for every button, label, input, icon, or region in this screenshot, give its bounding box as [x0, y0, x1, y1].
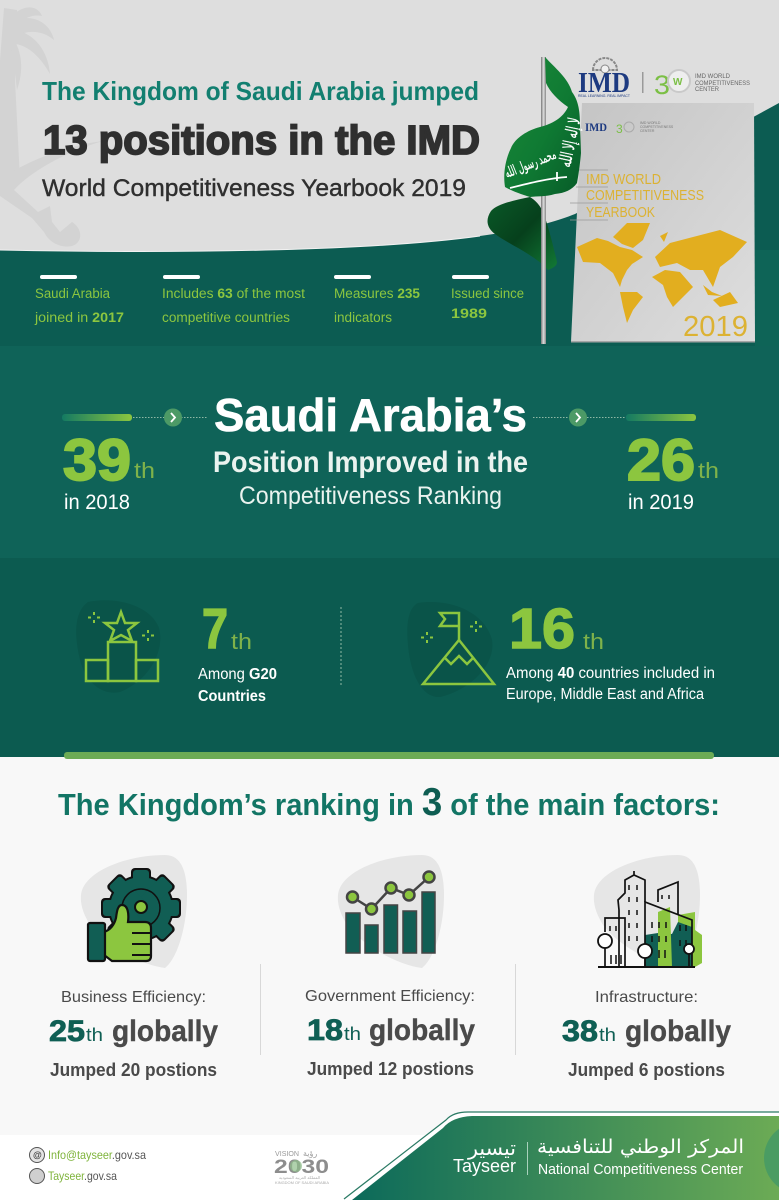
2019 rank: in 2019 [628, 491, 694, 514]
flag inscription [502, 116, 584, 182]
title [42, 76, 480, 202]
cover title: COMPETITIVENESS [586, 188, 704, 204]
cover title: IMD WORLD [586, 172, 661, 188]
IMD logo: COMPETITIVENESS [695, 80, 751, 87]
cover small logo: IMD WORLD [640, 121, 661, 125]
jump: Jumped 6 postions [568, 1060, 725, 1080]
ranking band [0, 346, 779, 558]
thumb [104, 905, 151, 961]
rank: globally [112, 1015, 218, 1048]
fact: indicators: indicators [334, 310, 392, 325]
label: Business Efficiency: [61, 989, 206, 1006]
cover small logo: IMD [585, 120, 607, 134]
icon: podium [76, 600, 160, 693]
rank [562, 1015, 731, 1048]
cover title: YEARBOOK [586, 205, 655, 221]
rank [307, 1014, 475, 1047]
contact: email: Info@tayseer.gov.sa [48, 1148, 146, 1162]
cover small logo: COMPETITIVENESS [640, 125, 674, 129]
center name [537, 1136, 744, 1178]
cover small logo: 3 [616, 122, 623, 136]
icon: city skyline [594, 855, 702, 968]
rank: 18 [307, 1014, 343, 1047]
Europe, Middle East and Africa text: 16 [509, 597, 575, 661]
flag inscription: محمد رسول الله [502, 146, 559, 182]
factor: infrastructure [562, 855, 731, 1080]
center name: المركز الوطني للتنافسية [537, 1136, 744, 1158]
G20 text: 7 [202, 597, 228, 661]
center name: National Competitiveness Center [538, 1161, 743, 1178]
logo: Tayseer: تيسير [467, 1136, 516, 1160]
contact: website: Tayseer.gov.sa [48, 1169, 117, 1183]
right progress bar [533, 408, 696, 426]
fact: indicators: Measures 235 [334, 286, 420, 301]
logo: vision 2030 [274, 1149, 330, 1185]
rank [49, 1015, 218, 1048]
cover year: 2019 [683, 311, 748, 343]
2018 rank: in 2018 [64, 491, 130, 514]
rank: th [344, 1024, 361, 1044]
2019 rank: 26 [627, 428, 695, 493]
rank: th [599, 1025, 616, 1045]
2018 rank: 39 [63, 428, 131, 493]
IMD logo: CENTER [695, 86, 719, 93]
Europe, Middle East and Africa text: Among 40 countries included in [506, 665, 715, 682]
factor: business efficiency [49, 855, 218, 1080]
fact: countries [162, 275, 305, 325]
fact: issued: 1989 [451, 305, 487, 321]
fact: joined: joined in 2017 [34, 310, 124, 325]
G20 text [198, 597, 277, 705]
rank: 38 [562, 1015, 598, 1048]
fact: joined: Saudi Arabia [35, 286, 110, 301]
IMD logo: 3 [654, 70, 670, 100]
footer brand panel [343, 1112, 779, 1200]
yearbook cover [570, 103, 755, 343]
cover title [586, 172, 704, 221]
flag inscription: لا إله إلا الله [555, 116, 584, 169]
heading: Saudi Arabia’s [214, 389, 527, 441]
heading: Competitiveness Ranking [239, 482, 502, 510]
world map [577, 223, 747, 323]
fact: countries: Includes 63 of the most [162, 286, 305, 301]
logo: vision 2030: VISION [275, 1151, 299, 1158]
factors heading: The Kingdom’s ranking in 3 of the main factors: [58, 781, 720, 824]
jump: Jumped 12 postions [307, 1059, 474, 1079]
cover small logo: CENTER [640, 129, 655, 133]
title: World Competitiveness Yearbook 2019 [42, 175, 466, 202]
fact: indicators [334, 275, 420, 325]
rank: globally [369, 1014, 475, 1047]
logo: vision 2030: المملكة العربية السعودية [279, 1175, 320, 1180]
palm and swords watermark [0, 7, 103, 246]
regional rankings band [0, 558, 779, 759]
fact: countries: competitive countries [162, 310, 290, 325]
rank: th [86, 1025, 103, 1045]
logo: Tayseer [453, 1136, 516, 1176]
logo: vision 2030: 2030 [274, 1157, 329, 1178]
2018 rank [63, 428, 155, 514]
green divider bar [64, 752, 714, 759]
logo: vision 2030: KINGDOM OF SAUDI ARABIA [275, 1181, 330, 1185]
2018 rank: th [134, 458, 155, 483]
fact: joined [34, 275, 124, 325]
IMD logo: W [673, 77, 683, 88]
left progress bar [62, 408, 208, 426]
factor: government efficiency [305, 855, 475, 1079]
Europe, Middle East and Africa text: Europe, Middle East and Africa [506, 686, 704, 703]
icon: gear and thumb [81, 855, 187, 968]
chevron [569, 408, 587, 426]
IMD logo: REAL LEARNING. REAL IMPACT [578, 93, 630, 98]
IMD logo: IMD WORLD [695, 73, 730, 80]
2019 rank [627, 428, 719, 514]
title: The Kingdom of Saudi Arabia jumped [42, 76, 479, 106]
rank: 25 [49, 1015, 85, 1048]
flag [488, 57, 584, 344]
G20 text: Among G20 [198, 666, 277, 683]
IMD logo: IMD [578, 68, 630, 99]
flag sword [510, 172, 567, 188]
footer [0, 1112, 779, 1200]
rank: globally [625, 1015, 731, 1048]
jump: Jumped 20 postions [50, 1060, 217, 1080]
cover small logo [585, 120, 674, 136]
icon: mountain flag [407, 602, 494, 697]
IMD logo [578, 58, 751, 100]
logo: vision 2030: رؤية [303, 1149, 317, 1158]
G20 text: Countries [198, 688, 266, 705]
fact: issued [451, 275, 524, 321]
Europe, Middle East and Africa text: th [583, 629, 604, 654]
flag lower fold [488, 197, 557, 270]
label: Infrastructure: [595, 989, 698, 1006]
label: Government Efficiency: [305, 988, 475, 1005]
logo: Tayseer: Tayseer [453, 1156, 516, 1176]
title: 13 positions in the IMD [43, 117, 480, 163]
flag cloth [504, 57, 581, 197]
G20 text: th [231, 629, 252, 654]
dark green header wave [0, 103, 779, 346]
heading: Position Improved in the [213, 446, 528, 479]
header panel [0, 0, 779, 346]
chevron [164, 408, 182, 426]
fact: issued: Issued since [451, 286, 524, 301]
contact: email: @ [33, 1150, 42, 1160]
gear [101, 868, 181, 948]
Europe, Middle East and Africa text [506, 597, 715, 703]
flag pole [541, 57, 546, 344]
2019 rank: th [698, 458, 719, 483]
icon: bar and line chart [338, 855, 444, 968]
divider [340, 607, 342, 686]
heading [213, 389, 528, 510]
